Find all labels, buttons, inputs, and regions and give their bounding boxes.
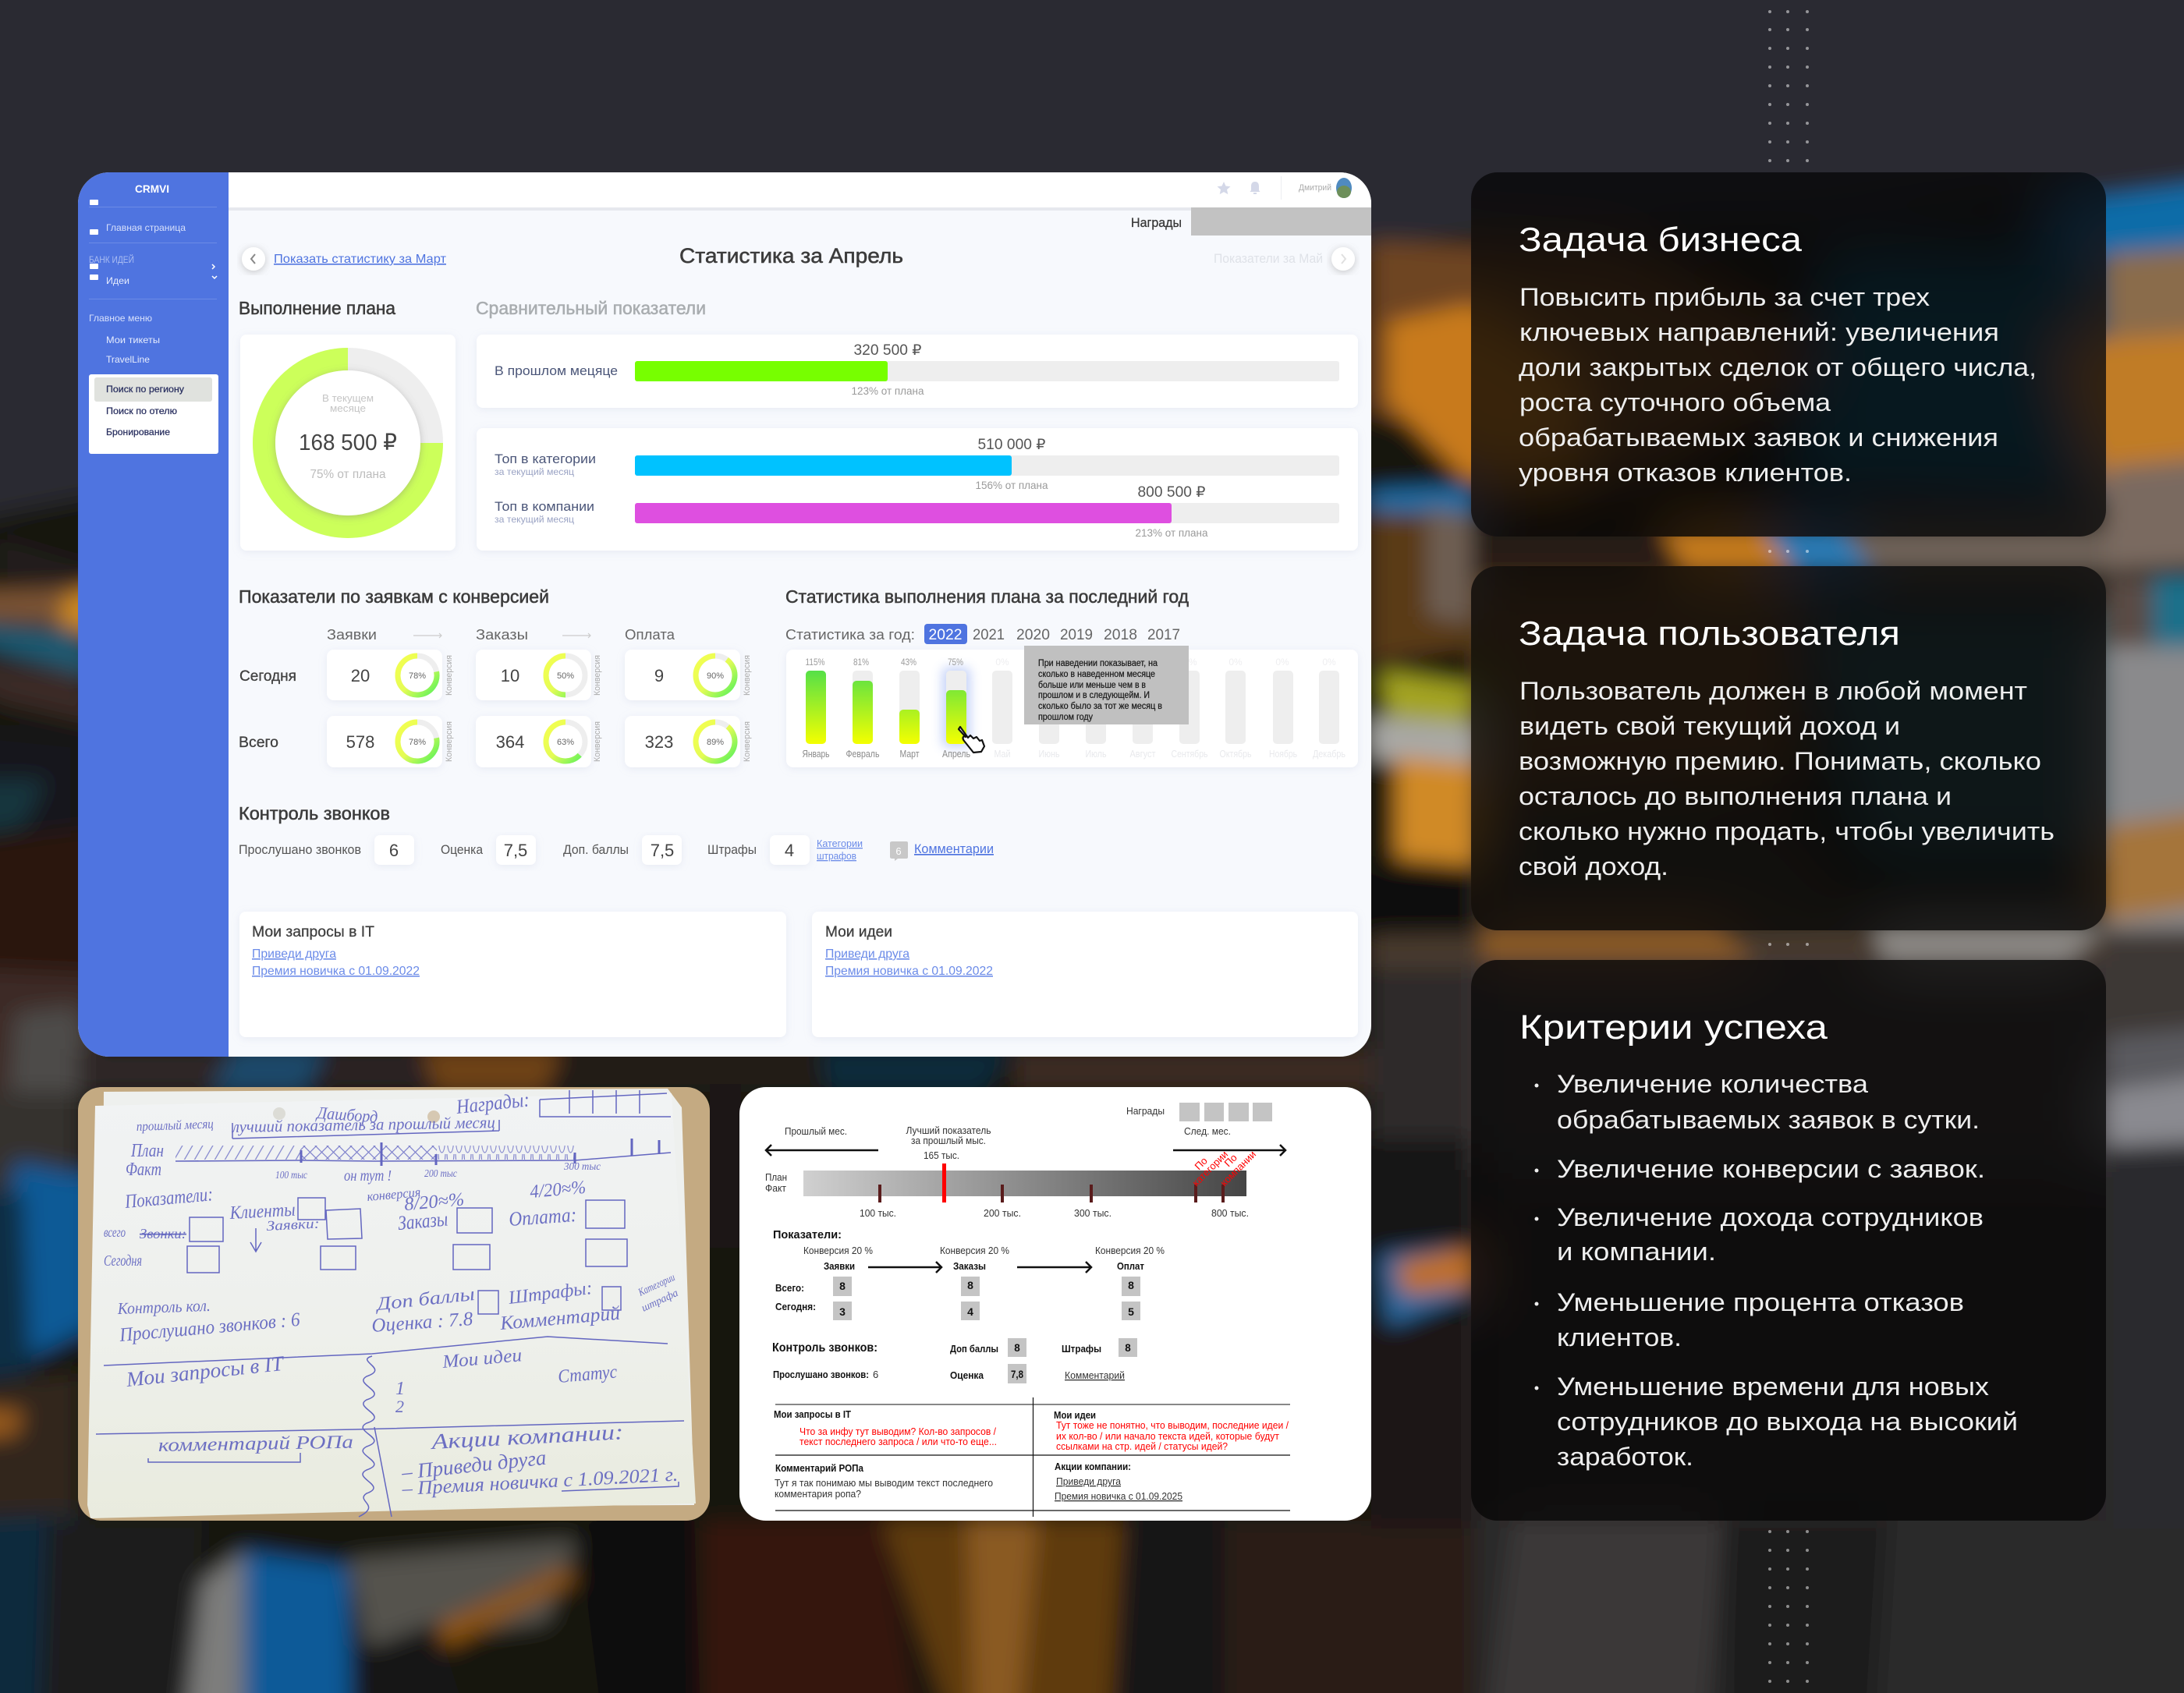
panel: yearly plan chart: Февраль	[846, 748, 880, 760]
panel: yearly plan chart: Апрель	[942, 748, 970, 760]
wireframe: indicators: Конверсия 20 %	[803, 1245, 873, 1256]
panel: yearly plan chart: Январь	[802, 748, 830, 760]
wireframe: plan timeline: 165 тыс.	[924, 1149, 959, 1161]
panel: yearly plan chart: Статистика выполнения плана за последний год	[785, 586, 1190, 607]
panel: wireframe	[739, 1087, 1371, 1521]
vertical conversion labels: Конверсия	[445, 655, 454, 696]
panel: my ideas: Мои идеи	[825, 924, 892, 940]
panel: comparison last month: 320 500 ₽	[853, 342, 922, 359]
wireframe: indicators: 8	[1128, 1279, 1134, 1291]
handwriting: 8/20≈%	[403, 1189, 465, 1215]
panel: yearly plan chart	[785, 586, 1358, 767]
sidebar: Главное меню	[89, 313, 152, 324]
panel: success criteria: клиентов.	[1557, 1323, 1682, 1351]
panel: business task: Повысить прибыль за счет трех	[1519, 283, 1930, 311]
wireframe: indicators: Конверсия 20 %	[940, 1245, 1009, 1256]
panel: comparison top: 156% от плана	[975, 479, 1048, 491]
panel: yearly plan chart: 0%	[995, 657, 1009, 668]
panel: success criteria	[1519, 1008, 2018, 1471]
handwriting: Звонки:	[140, 1226, 186, 1241]
wireframe: call control: Прослушано звонков:	[773, 1369, 869, 1380]
panel: user task: возможную премию. Понимать, сколько	[1519, 747, 2041, 775]
wireframe: indicators: 8	[839, 1280, 846, 1292]
panel: conversion indicators: Показатели по заявкам с конверсией	[239, 586, 549, 607]
panel: my IT requests	[239, 912, 786, 1037]
panel: success criteria: и компании.	[1557, 1238, 1716, 1266]
wireframe: bottom table: их кол-во / или начало текста идей, которые будут	[1056, 1430, 1279, 1442]
wireframe: plan timeline: Лучший показатель	[906, 1125, 991, 1136]
top bar: Награды	[1131, 215, 1182, 230]
sidebar	[78, 172, 229, 1057]
panel: conversion indicators: 9	[654, 666, 664, 685]
vertical conversion labels: Конверсия	[445, 721, 454, 762]
panel: yearly plan chart: 115%	[805, 657, 825, 668]
panel: yearly plan chart: 0%	[1275, 657, 1289, 668]
top bar	[229, 172, 1371, 236]
panel: success criteria: Увеличение количества	[1557, 1070, 1868, 1098]
tooltip: больше или меньше чем в в	[1038, 681, 1146, 690]
panel: my ideas: Приведи друга	[825, 947, 909, 961]
panel: success criteria: Уменьшение времени для новых	[1557, 1372, 1989, 1401]
panel: user task	[1519, 615, 2055, 880]
panel: yearly plan chart: 2020	[1016, 627, 1050, 643]
handwriting: Штрафы:	[507, 1278, 594, 1309]
wireframe: bottom table: комментария ропа?	[775, 1488, 861, 1500]
panel: plan donut: В текущем	[322, 392, 374, 404]
wireframe: indicators: Заказы	[953, 1260, 986, 1272]
panel: user task: свой доход.	[1519, 852, 1668, 880]
wireframe: plan timeline: Прошлый мес.	[785, 1125, 847, 1137]
wireframe: call control: 7,8	[1011, 1369, 1023, 1380]
panel: success criteria: Уменьшение процента отказов	[1557, 1288, 1964, 1316]
handwriting: Клиенты	[229, 1200, 296, 1224]
wireframe: indicators: 4	[967, 1305, 973, 1318]
wireframe: call control: Доп баллы	[950, 1343, 998, 1355]
ring 50%: 50%	[557, 671, 574, 681]
vertical conversion labels: Конверсия	[743, 721, 752, 762]
panel: yearly plan chart: Август	[1129, 748, 1156, 760]
wireframe: plan timeline: По	[1193, 1155, 1210, 1172]
panel: conversion indicators: 364	[496, 732, 524, 752]
wireframe: plan timeline: 200 тыс.	[984, 1207, 1021, 1219]
wireframe: plan timeline: Факт	[765, 1182, 786, 1194]
sidebar: Главная страница	[106, 222, 186, 233]
wireframe: indicators: Сегодня:	[775, 1301, 816, 1312]
sketched timeline and boxes	[96, 1090, 684, 1517]
tooltip: сколько было за тот же месяц в	[1038, 702, 1162, 711]
panel: comparison last month	[480, 345, 1354, 409]
panel: yearly plan chart: 0%	[1183, 657, 1197, 668]
wireframe: bottom table	[774, 1397, 1290, 1517]
ring 50%	[546, 656, 585, 695]
handwriting: он тут !	[344, 1167, 392, 1185]
panel: call control: Контроль звонков	[239, 803, 390, 823]
section headings	[240, 301, 705, 318]
panel: yearly plan chart: 81%	[853, 657, 869, 668]
tooltip: сколько в наведенном месяце	[1038, 670, 1155, 679]
handwriting: – Премия новичка с 1.09.2021 г.	[401, 1465, 679, 1500]
panel: yearly plan chart: 2022	[928, 627, 963, 643]
handwriting: План	[130, 1141, 164, 1161]
panel: conversion indicators	[239, 586, 752, 767]
wireframe: awards: Награды	[1126, 1105, 1165, 1117]
handwriting: Комментарий	[498, 1303, 621, 1334]
handwriting: Сегодня	[104, 1252, 142, 1270]
panel: yearly plan chart: 0%	[1322, 657, 1336, 668]
handwriting: всего	[104, 1224, 126, 1240]
panel: comparison top: 213% от плана	[1136, 526, 1208, 539]
panel: yearly plan chart: Июль	[1086, 748, 1107, 760]
vertical conversion labels: Конверсия	[593, 721, 602, 762]
panel: success criteria: Увеличение дохода сотрудников	[1557, 1203, 1984, 1231]
wireframe: bottom table: Мои запросы в IT	[774, 1408, 851, 1420]
wireframe: plan timeline: 100 тыс.	[860, 1207, 896, 1219]
wireframe: plan timeline: След. мес.	[1184, 1125, 1231, 1137]
panel: yearly plan chart: 43%	[901, 657, 916, 668]
panel: business task	[1519, 221, 2037, 487]
sidebar: Мои тикеты	[106, 335, 160, 345]
panel: comparison top: за текущий месяц	[495, 514, 574, 525]
handwriting: Мои запросы в IT	[124, 1351, 286, 1391]
wireframe: bottom table: Мои идеи	[1054, 1409, 1096, 1421]
panel: conversion indicators: 20	[351, 666, 370, 685]
wireframe: bottom table: Тут тоже не понятно, что выводим, последние идеи /	[1056, 1419, 1289, 1431]
wireframe: call control: Штрафы	[1062, 1343, 1101, 1355]
panel: user task: Задача пользователя	[1519, 615, 1900, 653]
vertical conversion labels: Конверсия	[593, 655, 602, 696]
sidebar: TravelLine	[106, 354, 150, 365]
ring 78% total	[398, 722, 437, 761]
panel: call control: 6	[895, 845, 902, 857]
panel: plan donut	[240, 335, 456, 551]
wireframe: plan timeline: План	[765, 1171, 787, 1183]
tooltip: прошлом и в следующейм. И	[1038, 691, 1150, 700]
handwriting: Факт	[126, 1160, 161, 1180]
panel: call control: Комментарии	[914, 841, 994, 856]
wireframe: call control: Комментарий	[1065, 1369, 1125, 1381]
panel: user task: осталось до выполнения плана и	[1519, 782, 1952, 810]
handwriting: лучший показатель за прошлый месяц	[232, 1113, 495, 1136]
wireframe: call control: 8	[1125, 1342, 1131, 1354]
sidebar: БАНК ИДЕЙ	[89, 253, 134, 265]
panel: yearly plan chart: 0%	[1042, 657, 1056, 668]
decorative dot grid top	[1768, 10, 1809, 1683]
ring 78% total: 78%	[409, 738, 426, 747]
panel: yearly plan chart: 0%	[1089, 657, 1103, 668]
ring 90%: 90%	[707, 671, 724, 681]
handwriting: прошлый месяц	[136, 1117, 214, 1134]
handwriting: Оценка : 7.8	[371, 1309, 474, 1337]
ring 90%	[696, 656, 735, 695]
top bar: Дмитрий	[1299, 183, 1331, 193]
handwriting: Акции компании:	[429, 1420, 624, 1454]
wireframe: call control: 8	[1014, 1342, 1020, 1354]
panel: hand-drawn sketch photo	[78, 1087, 710, 1521]
panel: yearly plan chart: Статистика за год:	[785, 627, 915, 643]
ring 63% total: 63%	[557, 738, 574, 747]
panel: comparison top: 800 500 ₽	[1137, 484, 1206, 501]
section headings: Сравнительный показатели	[476, 298, 706, 318]
sidebar: Поиск по отелю	[106, 406, 177, 416]
handwriting: Контроль кол.	[116, 1296, 211, 1318]
ring 89% total	[696, 722, 735, 761]
panel: CRM dashboard screenshot	[78, 172, 1371, 1057]
sidebar: Поиск по региону	[106, 384, 184, 395]
panel: yearly plan chart: Июнь	[1039, 748, 1060, 760]
wireframe: indicators	[773, 1228, 1165, 1320]
panel: yearly plan chart: 2021	[973, 627, 1005, 643]
panel: plan donut: 168 500 ₽	[299, 430, 397, 455]
panel: my IT requests: Приведи друга	[252, 947, 336, 961]
panel: my IT requests: Премия новичка с 01.09.2022	[252, 965, 420, 978]
panel: success criteria: Критерии успеха	[1519, 1008, 1828, 1047]
handwriting: Мои идеи	[441, 1345, 523, 1372]
handwriting: Награды:	[455, 1088, 530, 1118]
handwriting: Статус	[557, 1362, 619, 1387]
panel: yearly plan chart: Ноябрь	[1269, 748, 1297, 760]
handwriting: Заявки:	[266, 1215, 320, 1234]
panel: plan donut: месяце	[330, 402, 366, 414]
panel: call control: Прослушано звонков	[239, 842, 361, 857]
handwriting: 2	[395, 1397, 404, 1416]
handwriting: Показатели:	[123, 1184, 214, 1213]
wireframe: bottom table: Премия новичка с 01.09.2025	[1055, 1490, 1182, 1502]
wireframe: bottom table: текст последнего запроса / или что-то еще...	[800, 1436, 997, 1447]
panel: user task: видеть свой текущий доход и	[1519, 712, 1900, 740]
wireframe: plan timeline: 800 тыс.	[1211, 1207, 1249, 1219]
sidebar: CRMVI	[135, 182, 169, 195]
handwriting: Оплата:	[508, 1203, 577, 1231]
wireframe: plan timeline: По	[1222, 1152, 1239, 1169]
panel: business task: Задача бизнеса	[1519, 221, 1803, 259]
wireframe: plan timeline: 300 тыс.	[1074, 1207, 1112, 1219]
handwriting: 4/20≈%	[529, 1178, 587, 1202]
panel: comparison top: за текущий месяц	[495, 466, 574, 477]
handwriting: – Приведи друга	[399, 1446, 548, 1484]
panel: my ideas: Премия новичка с 01.09.2022	[825, 965, 993, 978]
panel: my IT requests: Мои запросы в IT	[252, 924, 374, 940]
title row	[242, 244, 1355, 271]
handwriting: комментарий РОПа	[158, 1433, 353, 1456]
panel: call control	[239, 803, 994, 865]
panel: call control: 7,5	[504, 841, 527, 860]
panel: business task: ключевых направлений: увеличения	[1519, 318, 1999, 346]
panel: success criteria: Увеличение конверсии с заявок.	[1557, 1155, 1985, 1183]
panel: comparison top: Топ в категории	[495, 452, 596, 466]
panel: success criteria: сотрудников до выхода на высокий	[1557, 1408, 2018, 1436]
panel: call control: 7,5	[651, 841, 674, 860]
tooltip: прошлом году	[1038, 713, 1093, 722]
handwriting: 1	[395, 1379, 405, 1399]
panel: yearly plan chart: 0%	[1136, 657, 1150, 668]
panel: call control: 6	[389, 841, 399, 860]
panel: yearly plan chart: Сентябрь	[1172, 748, 1208, 760]
handwriting: Прослушано звонков : 6	[118, 1309, 301, 1346]
handwriting: Доп баллы	[374, 1284, 476, 1315]
handwriting: Заказы	[397, 1208, 448, 1234]
vertical conversion labels	[445, 655, 752, 762]
panel: conversion indicators: Заказы	[476, 627, 528, 643]
wireframe: bottom table: Комментарий РОПа	[775, 1462, 864, 1474]
panel: comparison top	[477, 428, 1358, 551]
ring 63% total	[546, 722, 585, 761]
panel: user task: сколько нужно продать, чтобы увеличить	[1519, 817, 2055, 845]
wireframe: indicators: Конверсия 20 %	[1095, 1245, 1165, 1256]
ring 78%: 78%	[409, 671, 426, 681]
panel: business task: доли закрытых сделок от общего числа,	[1519, 353, 2037, 381]
panel: user task: Пользователь должен в любой момент	[1519, 677, 2027, 705]
panel: yearly plan chart: 2019	[1060, 627, 1093, 643]
wireframe: indicators: Оплат	[1117, 1260, 1144, 1272]
sidebar: Бронирование	[106, 427, 170, 437]
icon: hand cursor	[959, 727, 984, 753]
wireframe: indicators: 8	[967, 1279, 973, 1291]
panel: success criteria: обрабатываемых заявок в сутки.	[1557, 1106, 1980, 1134]
wireframe: plan timeline: компании	[1218, 1149, 1258, 1188]
panel: comparison top: Топ в компании	[495, 499, 594, 514]
panel: yearly plan chart: Октябрь	[1220, 748, 1252, 760]
panel: conversion indicators: 323	[645, 732, 673, 752]
handwriting: 300 тыс	[563, 1161, 601, 1173]
ring 78%	[398, 656, 437, 695]
handwriting: штрафа	[640, 1287, 680, 1315]
sidebar: Идеи	[106, 275, 129, 286]
wireframe: indicators: 3	[839, 1305, 846, 1318]
wireframe: bottom table: Что за инфу тут выводим? Кол-во запросов /	[800, 1426, 996, 1437]
wireframe: awards	[1126, 1103, 1272, 1121]
panel: my ideas	[812, 912, 1358, 1037]
panel: business task: обрабатываемых заявок и снижения	[1519, 423, 1998, 452]
panel: yearly plan chart: Декабрь	[1313, 748, 1346, 760]
wireframe: call control	[772, 1338, 1137, 1383]
panel: conversion indicators: 578	[346, 732, 374, 752]
panel: conversion indicators: Всего	[239, 735, 278, 751]
wireframe: call control: Контроль звонков:	[772, 1341, 878, 1355]
panel: success criteria: заработок.	[1557, 1443, 1693, 1471]
panel: comparison last month: В прошлом мецяце	[495, 363, 618, 378]
wireframe: indicators: Показатели:	[773, 1228, 842, 1241]
panel: call control: 4	[785, 841, 794, 860]
panel: call control: Категории	[817, 838, 863, 849]
panel: call control: Доп. баллы	[563, 842, 629, 857]
wireframe: indicators: 5	[1128, 1305, 1134, 1318]
vertical conversion labels: Конверсия	[743, 655, 752, 696]
wireframe: plan timeline: за прошлый мыс.	[911, 1135, 986, 1146]
panel: yearly plan chart: 0%	[1228, 657, 1243, 668]
wireframe: indicators: Всего:	[775, 1282, 804, 1294]
handwriting: 200 тыс	[424, 1168, 458, 1180]
panel: conversion indicators: Сегодня	[239, 668, 296, 685]
title row: Показать статистику за Март	[274, 253, 447, 266]
handwriting: конверсия	[367, 1185, 421, 1204]
wireframe: call control: Оценка	[950, 1369, 984, 1381]
panel: business task: уровня отказов клиентов.	[1519, 459, 1852, 487]
panel: plan donut: 75% от плана	[310, 468, 386, 481]
wireframe: bottom table: ссылками на стр. идей / статусы идей?	[1056, 1440, 1228, 1452]
panel: yearly plan chart: 75%	[948, 657, 963, 668]
panel: yearly plan chart: Март	[900, 748, 920, 760]
panel: comparison last month: 123% от плана	[852, 384, 924, 397]
panel: business task: роста суточного объема	[1519, 388, 1831, 416]
panel: comparison top: 510 000 ₽	[978, 437, 1045, 453]
panel: yearly plan chart: 2017	[1147, 627, 1180, 643]
wireframe: plan timeline: категории	[1190, 1149, 1230, 1188]
handwriting: Категории	[636, 1272, 677, 1299]
handwriting	[104, 1088, 680, 1500]
handwriting: 100 тыс	[275, 1170, 308, 1181]
ring 89% total: 89%	[707, 738, 724, 747]
title row: Показатели за Май	[1214, 251, 1323, 266]
panel: call control: Штрафы	[707, 842, 757, 857]
wireframe: indicators: Заявки	[824, 1260, 855, 1272]
handwriting: Дашборд	[315, 1103, 378, 1126]
wireframe: bottom table: Приведи друга	[1056, 1475, 1122, 1487]
panel: conversion indicators: Заявки	[327, 627, 377, 643]
wireframe: plan timeline	[765, 1125, 1285, 1219]
wireframe: bottom table: Тут я так понимаю мы выводим текст последнего	[775, 1477, 993, 1489]
section headings: Выполнение плана	[239, 298, 395, 318]
panel: call control: Оценка	[441, 842, 483, 857]
panel: conversion indicators: Оплата	[625, 627, 675, 643]
panel: call control: штрафов	[817, 850, 856, 862]
wireframe: call control: 6	[873, 1369, 878, 1380]
title row: Статистика за Апрель	[679, 244, 903, 267]
panel: yearly plan chart: Май	[994, 748, 1011, 760]
wireframe: bottom table: Акции компании:	[1055, 1461, 1131, 1472]
tooltip	[1024, 646, 1189, 724]
panel: yearly plan chart: 2018	[1104, 627, 1137, 643]
tooltip: При наведении показывает, на	[1038, 659, 1158, 668]
panel: conversion indicators: 10	[501, 666, 519, 685]
